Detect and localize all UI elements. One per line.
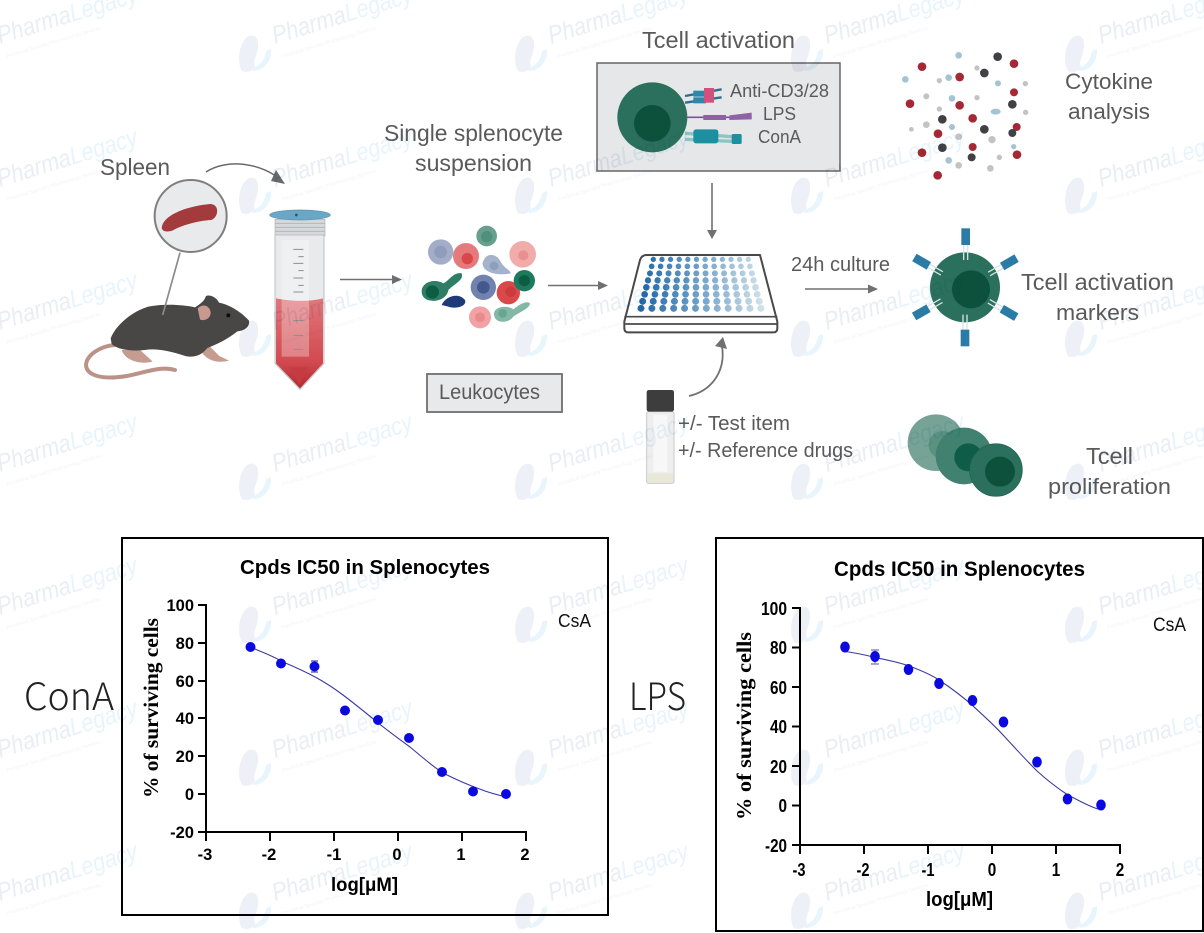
label: ConA: ConA [24, 666, 115, 721]
error bar [311, 661, 318, 672]
axes [792, 608, 1120, 854]
y tick labels [761, 599, 787, 856]
stimulus labels [730, 80, 829, 147]
watermark: PharmaLegacy tiled logos: PharmaLegacy [268, 266, 417, 335]
watermark: PharmaLegacy tiled logos: PharmaLegacy [820, 694, 969, 763]
label: test item and reference drugs: +/- Reference drugs [678, 440, 853, 462]
label: 24h culture: 24h culture [791, 254, 890, 276]
watermark: PharmaLegacy tiled logos: Preclinical Specialty Pharmacology Services [557, 25, 653, 60]
watermark: PharmaLegacy tiled logos: Preclinical Specialty Pharmacology Services [833, 168, 929, 203]
x tick labels: -2 [262, 846, 276, 864]
legend: CsA [558, 611, 591, 631]
watermark: PharmaLegacy tiled logos: Preclinical Specialty Pharmacology Services [281, 596, 377, 631]
y axis label: % of surviving cells [139, 618, 163, 798]
label: Tcell proliferation: Tcell [1086, 443, 1133, 469]
watermark: PharmaLegacy tiled logos: Preclinical Specialty Pharmacology Services [6, 596, 102, 631]
label: Tcell activation markers: markers [1056, 300, 1139, 325]
arrow: activation to plate [707, 183, 717, 239]
illustration: 96-well plate [624, 255, 777, 332]
heading: Tcell activation: Tcell activation [642, 27, 795, 53]
y tick labels: -20 [170, 824, 194, 842]
label: Tcell activation markers [1021, 269, 1174, 325]
x tick labels: 2 [1116, 860, 1124, 880]
watermark: PharmaLegacy tiled logos: Preclinical Specialty Pharmacology Services [557, 168, 653, 203]
x tick labels: -2 [856, 860, 870, 880]
spleen callout circle [155, 180, 227, 252]
label: test item and reference drugs: +/- Test item [678, 413, 790, 435]
y tick labels: 100 [166, 597, 194, 615]
label: Cytokine analysis: Cytokine [1065, 69, 1153, 94]
watermark: PharmaLegacy tiled logos: PharmaLegacy [544, 551, 693, 620]
watermark: PharmaLegacy tiled logos: Preclinical Specialty Pharmacology Services [6, 739, 102, 774]
illustration: mouse with spleen callout [86, 180, 249, 378]
y tick labels: 0 [185, 786, 194, 804]
legend: CsA [1153, 615, 1186, 636]
watermark: PharmaLegacy tiled logos: Preclinical Specialty Pharmacology Services [6, 25, 102, 60]
watermark: PharmaLegacy tiled logos: Preclinical Specialty Pharmacology Services [1107, 453, 1203, 488]
y tick labels: 80 [176, 635, 194, 653]
ConA receptor [685, 129, 742, 144]
watermark: PharmaLegacy tiled logos: PharmaLegacy [268, 123, 417, 192]
mouse eye [226, 313, 230, 317]
chart title: Cpds IC50 in Splenocytes [240, 556, 490, 579]
T cell [617, 82, 687, 152]
y tick labels: 60 [176, 673, 194, 691]
y tick labels: 20 [770, 757, 787, 777]
watermark: PharmaLegacy tiled logos: PharmaLegacy [544, 694, 693, 763]
mouse body [111, 296, 249, 357]
LPS receptor [687, 113, 752, 120]
stimulus labels: ConA [758, 126, 802, 147]
watermark: PharmaLegacy tiled logos: PharmaLegacy [820, 551, 969, 620]
x tick labels: -1 [327, 846, 341, 864]
panel: ConA IC50 chart [122, 538, 608, 915]
error bar [871, 650, 879, 664]
panel: LPS IC50 chart [716, 538, 1203, 931]
watermark: PharmaLegacy tiled logos: Preclinical Specialty Pharmacology Services [833, 311, 929, 346]
label: Cytokine analysis [1065, 69, 1153, 124]
x tick labels: -3 [792, 860, 806, 880]
y axis label: % of surviving cells [732, 632, 756, 820]
heading: Single splenocyte suspension: Single splenocyte [384, 120, 563, 146]
x axis label: log[μM] [926, 888, 993, 911]
watermark: PharmaLegacy tiled logos: PharmaLegacy [544, 266, 693, 335]
heading: Single splenocyte suspension: suspension [415, 150, 532, 176]
watermark: PharmaLegacy tiled logos: Preclinical Specialty Pharmacology Services [1107, 168, 1203, 203]
axes [198, 605, 526, 841]
watermark: PharmaLegacy tiled logos: Preclinical Specialty Pharmacology Services [1107, 739, 1203, 774]
watermark: PharmaLegacy tiled logos: PharmaLegacy [544, 408, 693, 477]
y tick labels: 60 [770, 678, 787, 698]
label: Tcell activation markers: Tcell activation [1021, 269, 1174, 295]
label: Tcell proliferation [1048, 443, 1171, 499]
watermark: PharmaLegacy tiled logos: Preclinical Specialty Pharmacology Services [557, 311, 653, 346]
panel: T cell activation stimuli [597, 63, 840, 171]
watermark: PharmaLegacy tiled logos: Preclinical Specialty Pharmacology Services [833, 882, 929, 917]
arrow: tube to cells [340, 275, 402, 284]
y tick labels: -20 [765, 836, 787, 856]
watermark: PharmaLegacy tiled logos: Preclinical Specialty Pharmacology Services [833, 25, 929, 60]
watermark: PharmaLegacy tiled logos: PharmaLegacy [268, 837, 417, 906]
fitted curve [250, 647, 507, 797]
x axis label: log[μM] [331, 874, 398, 896]
stimulus labels: LPS [763, 103, 796, 124]
arrow: vial to plate [689, 337, 727, 396]
watermark: PharmaLegacy tiled logos: PharmaLegacy [820, 266, 969, 335]
watermark: PharmaLegacy tiled logos: PharmaLegacy [544, 123, 693, 192]
watermark: PharmaLegacy tiled logos: Preclinical Specialty Pharmacology Services [281, 25, 377, 60]
label: Cytokine analysis: analysis [1068, 99, 1150, 124]
watermark: PharmaLegacy tiled logos: Preclinical Specialty Pharmacology Services [6, 168, 102, 203]
y tick labels: 80 [770, 638, 787, 658]
watermark: PharmaLegacy tiled logos: Preclinical Specialty Pharmacology Services [833, 739, 929, 774]
mouse feet [122, 347, 229, 363]
x tick labels: 0 [392, 846, 402, 864]
watermark: PharmaLegacy tiled logos: PharmaLegacy [820, 408, 969, 477]
y tick labels: 0 [778, 796, 787, 816]
callout line [163, 253, 180, 315]
y tick labels: 100 [761, 599, 787, 619]
watermark: PharmaLegacy tiled logos: Preclinical Specialty Pharmacology Services [557, 882, 653, 917]
x tick labels: -3 [198, 846, 212, 864]
watermark: PharmaLegacy tiled logos: PharmaLegacy [268, 551, 417, 620]
watermark: PharmaLegacy tiled logos: Preclinical Specialty Pharmacology Services [281, 311, 377, 346]
watermark: PharmaLegacy tiled logos: Preclinical Specialty Pharmacology Services [281, 453, 377, 488]
icon: test item vial [647, 390, 674, 483]
watermark: PharmaLegacy tiled logos: Preclinical Specialty Pharmacology Services [1107, 25, 1203, 60]
icon: centrifuge tube [270, 210, 330, 389]
y tick labels: 40 [770, 717, 787, 737]
watermark: PharmaLegacy tiled logos: PharmaLegacy [544, 837, 693, 906]
watermark: PharmaLegacy tiled logos: Preclinical Specialty Pharmacology Services [833, 596, 929, 631]
watermark: PharmaLegacy tiled logos: Preclinical Specialty Pharmacology Services [6, 311, 102, 346]
x tick labels [198, 846, 530, 864]
watermark: PharmaLegacy tiled logos: Preclinical Specialty Pharmacology Services [1107, 311, 1203, 346]
data points [246, 642, 511, 799]
watermark: PharmaLegacy tiled logos: Preclinical Specialty Pharmacology Services [281, 882, 377, 917]
label: test item and reference drugs [678, 413, 853, 462]
x tick labels: 0 [988, 860, 996, 880]
anti-CD3/28 receptors [685, 88, 722, 103]
illustration: cytokine dots [902, 52, 1028, 180]
y tick labels: 20 [176, 748, 194, 766]
arrow: cells to plate [548, 281, 608, 290]
chart title: Cpds IC50 in Splenocytes [834, 557, 1085, 581]
watermark: PharmaLegacy tiled logos: Preclinical Specialty Pharmacology Services [1107, 596, 1203, 631]
illustration: leukocytes [422, 226, 536, 328]
y tick labels: 40 [176, 710, 194, 728]
watermark: PharmaLegacy tiled logos: PharmaLegacy [268, 694, 417, 763]
label: Tcell proliferation: proliferation [1048, 474, 1171, 499]
watermark: PharmaLegacy tiled logos: PharmaLegacy [820, 123, 969, 192]
x tick labels: 1 [456, 846, 466, 864]
watermark: PharmaLegacy tiled logos: Preclinical Specialty Pharmacology Services [6, 882, 102, 917]
watermark: PharmaLegacy tiled logos: Preclinical Specialty Pharmacology Services [281, 168, 377, 203]
watermark: PharmaLegacy tiled logos: Preclinical Specialty Pharmacology Services [6, 453, 102, 488]
arrow: culture to readouts [805, 284, 878, 294]
data points [840, 642, 1106, 810]
x tick labels: -1 [922, 860, 934, 880]
mouse ear [198, 305, 211, 320]
watermark: PharmaLegacy tiled logos: PharmaLegacy [820, 837, 969, 906]
label box: Leukocytes [427, 374, 562, 412]
y tick labels [166, 597, 194, 842]
illustration: T cell with activation markers [912, 228, 1019, 346]
watermark: PharmaLegacy tiled logos: PharmaLegacy [268, 408, 417, 477]
watermark: PharmaLegacy tiled logos: Preclinical Specialty Pharmacology Services [833, 453, 929, 488]
fitted curve [845, 652, 1098, 809]
x tick labels: 2 [520, 846, 530, 864]
label box: Leukocytes: Leukocytes [439, 381, 540, 404]
watermark: PharmaLegacy tiled logos: Preclinical Specialty Pharmacology Services [281, 739, 377, 774]
label: Spleen: Spleen [100, 154, 170, 180]
watermark: PharmaLegacy tiled logos: Preclinical Specialty Pharmacology Services [557, 739, 653, 774]
watermark: PharmaLegacy tiled logos: Preclinical Specialty Pharmacology Services [1107, 882, 1203, 917]
illustration: proliferating T cells [908, 414, 1022, 496]
x tick labels: 1 [1052, 860, 1060, 880]
mouse tail [86, 345, 175, 378]
arrow: spleen to tube [206, 164, 285, 184]
heading: Single splenocyte suspension [384, 120, 563, 176]
stimulus labels: Anti-CD3/28 [730, 80, 829, 101]
watermark: PharmaLegacy tiled logos: Preclinical Specialty Pharmacology Services [557, 453, 653, 488]
x tick labels [792, 860, 1124, 880]
watermark: PharmaLegacy tiled logos: Preclinical Specialty Pharmacology Services [557, 596, 653, 631]
label: LPS: LPS [629, 666, 686, 721]
spleen [162, 204, 217, 231]
